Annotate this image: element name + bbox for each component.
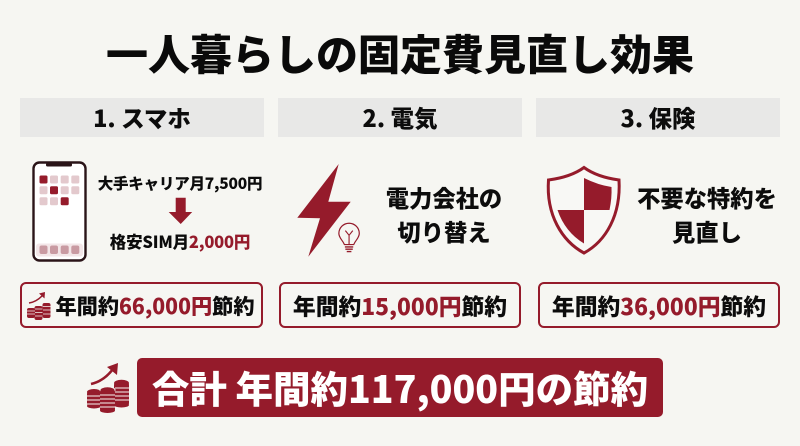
savings box: insurance (538, 282, 780, 328)
panel header: 3. insurance: 3. 保険 (621, 100, 695, 134)
savings box: electricity: 年間約15,000円節約 (293, 289, 507, 322)
panel header: 1. smartphone (20, 98, 264, 137)
savings box: insurance: 年間約36,000円節約 (552, 289, 766, 322)
text: review unneeded riders: 見直し (672, 214, 742, 248)
text: switch power company: 電力会社の (386, 180, 502, 214)
text: review unneeded riders (637, 180, 777, 248)
text: major carrier price: 大手キャリア月7,500円 (98, 172, 262, 194)
panel header: 2. electricity (278, 98, 522, 137)
text: budget SIM price: 格安SIM月2,000円 (110, 229, 250, 253)
title: 一人暮らしの固定費見直し効果 (106, 22, 694, 83)
text: switch power company (386, 180, 502, 248)
icon: smartphone (32, 161, 87, 262)
panel header: 3. insurance (536, 98, 780, 137)
text: switch power company: 切り替え (397, 214, 491, 248)
panel header: 2. electricity: 2. 電気 (363, 100, 437, 134)
icon: coins with rising arrow large (87, 363, 129, 413)
icon: lightning bolt (297, 164, 351, 257)
text: review unneeded riders: 不要な特約を (637, 180, 777, 214)
icon: light bulb (338, 222, 360, 252)
savings box: electricity (279, 282, 521, 328)
icon: shield (546, 166, 621, 255)
panel header: 1. smartphone: 1. スマホ (93, 100, 191, 134)
savings box: smartphone (20, 282, 263, 328)
icon: down arrow (168, 198, 192, 224)
savings box: smartphone: 年間約66,000円節約 (55, 290, 255, 321)
total savings banner: 合計 年間約117,000円の節約 (152, 359, 648, 414)
icon: coins with rising arrow small (27, 292, 50, 320)
